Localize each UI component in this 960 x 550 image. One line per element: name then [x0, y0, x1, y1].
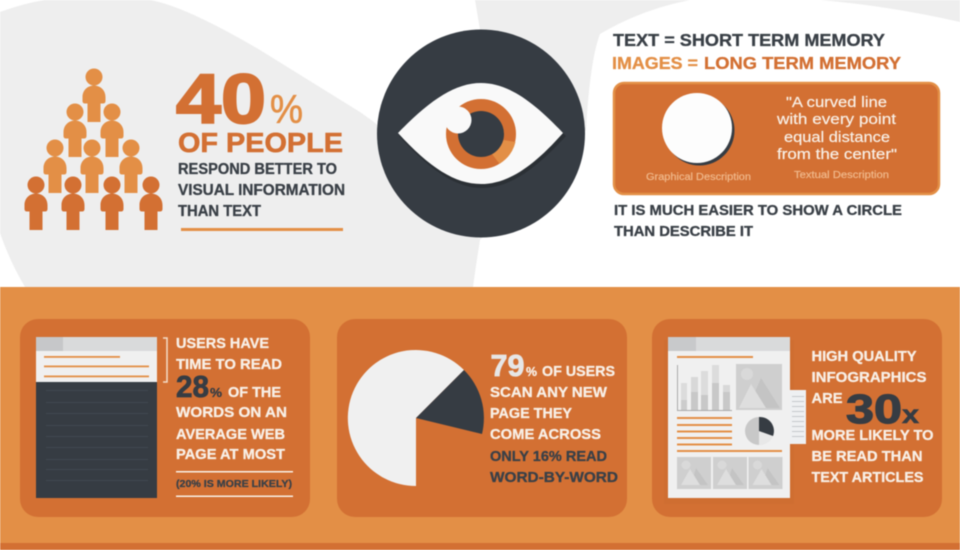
- text block: respond better: VISUAL INFORMATION: [178, 182, 345, 199]
- text block: 30x more likely: x: [902, 399, 920, 429]
- text block: easier to show a circle: [614, 203, 902, 240]
- text block: 30x more likely: INFOGRAPHICS: [812, 370, 927, 386]
- text block: 79% scan: %: [526, 364, 537, 379]
- bar chart: [677, 365, 732, 411]
- heading: of people: OF PEOPLE: [178, 127, 343, 158]
- icon: pyramid of people: [24, 68, 162, 230]
- text block: 30x more likely: BE READ THAN: [812, 449, 922, 465]
- text block: only 16% read: [490, 449, 618, 486]
- text block: easier to show a circle: IT IS MUCH EASIER TO SHOW A CIRCLE: [614, 203, 902, 219]
- icon: web page partly read: [36, 337, 157, 498]
- text block: users have time to read: WORDS ON AN: [176, 405, 287, 421]
- text block: respond better: [178, 161, 345, 220]
- panel: 79% of users scan: [337, 319, 627, 517]
- quote: textual description: with every point: [776, 111, 897, 128]
- small pie chart: [745, 417, 774, 445]
- big stat: 40%: %: [270, 88, 303, 132]
- card: circle description: [614, 83, 939, 194]
- label: graphical description: Graphical Description: [646, 172, 751, 183]
- text block: 79% scan: COME ACROSS: [490, 427, 601, 443]
- quote: textual description: "A curved line: [786, 94, 887, 111]
- text block: users have time to read: %: [210, 385, 222, 400]
- panel: infographics 30x: [652, 319, 942, 517]
- text block: users have time to read: [176, 336, 287, 463]
- text block: 30x more likely: MORE LIKELY TO: [812, 428, 934, 444]
- text block: 30x more likely: ARE: [812, 391, 843, 407]
- label: textual description: Textual Description: [794, 170, 889, 181]
- text block: 79% scan: 79: [490, 348, 524, 383]
- text block: 79% scan: [490, 348, 615, 443]
- quote: textual description: from the center": [777, 146, 897, 163]
- text block: users have time to read: TIME TO READ: [176, 357, 282, 373]
- panel: 40% of people: [24, 60, 345, 231]
- icon: infographic page: [664, 337, 806, 504]
- quote: textual description: equal distance: [784, 129, 890, 146]
- panel: memory comparison: [612, 30, 939, 240]
- text block: easier to show a circle: THAN DESCRIBE IT: [614, 224, 753, 240]
- text block: respond better: RESPOND BETTER TO: [178, 161, 337, 178]
- pie chart: [348, 350, 484, 486]
- bracket: [163, 338, 167, 382]
- heading: text short term memory: TEXT = SHORT TERM MEMORY: [613, 30, 885, 50]
- text block: only 16% read: WORD-BY-WORD: [490, 470, 618, 486]
- text block: 30x more likely: HIGH QUALITY: [812, 349, 917, 365]
- heading: images long term memory: [612, 53, 901, 73]
- quote: textual description: [776, 94, 897, 163]
- text block: users have time to read: USERS HAVE: [176, 336, 269, 352]
- text block: respond better: THAN TEXT: [178, 203, 262, 220]
- callout: 20% is more likely: [176, 471, 293, 497]
- heading: images long term memory: LONG TERM MEMORY: [704, 53, 901, 73]
- icon: eye: [377, 30, 585, 238]
- big stat: 40%: 40: [176, 60, 266, 138]
- text block: 30x more likely: TEXT ARTICLES: [812, 470, 924, 486]
- image placeholder: [736, 364, 782, 410]
- text block: 79% scan: SCAN ANY NEW: [490, 385, 607, 401]
- text block: 79% scan: PAGE THEY: [490, 406, 572, 422]
- text block: users have time to read: 28: [176, 369, 209, 404]
- text block: only 16% read: ONLY 16% READ: [490, 449, 607, 465]
- background blobs: [0, 0, 960, 287]
- heading: images long term memory: IMAGES =: [612, 53, 698, 73]
- text block: users have time to read: AVERAGE WEB: [176, 427, 285, 443]
- text block: users have time to read: PAGE AT MOST: [176, 447, 285, 463]
- orange band: [0, 287, 960, 550]
- text block: users have time to read: OF THE: [228, 385, 281, 401]
- callout: 20% is more likely: (20% IS MORE LIKELY): [176, 478, 292, 490]
- text block: 30x more likely: 30: [846, 386, 902, 432]
- text block: 79% scan: OF USERS: [542, 364, 615, 380]
- big stat: 40%: [176, 60, 303, 138]
- text block: 30x more likely: [812, 349, 934, 486]
- panel: 28% of words: [20, 319, 310, 517]
- icon: circle: [662, 93, 734, 166]
